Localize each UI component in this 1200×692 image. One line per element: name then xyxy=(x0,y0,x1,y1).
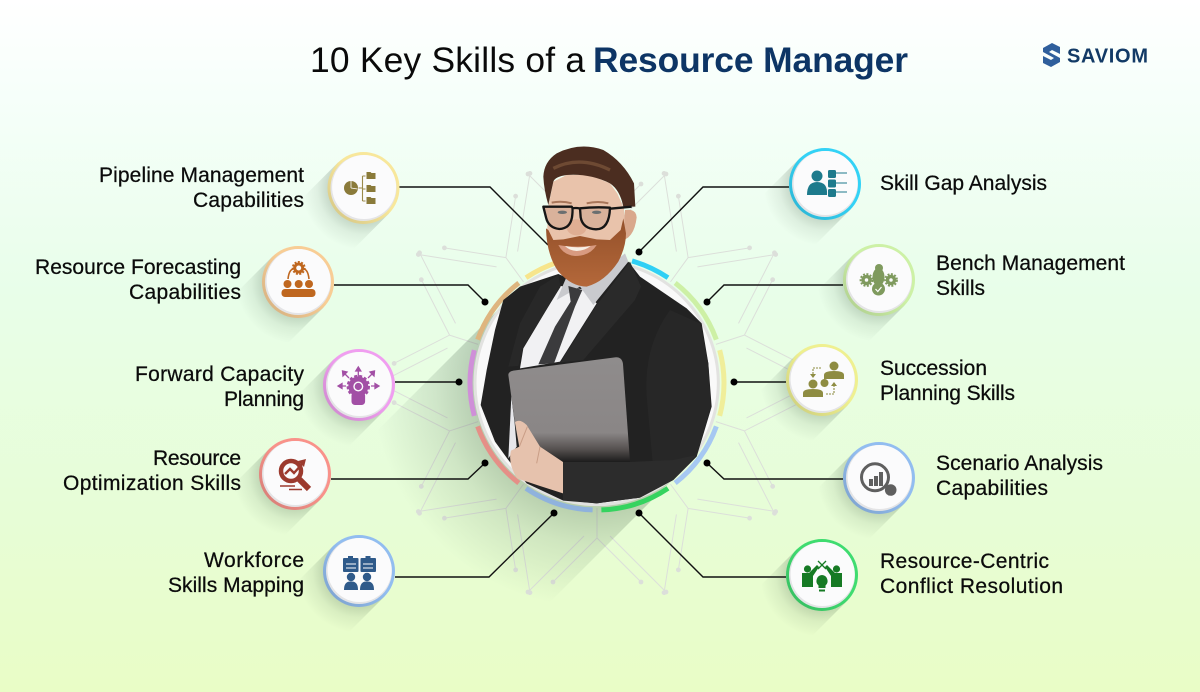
face skin xyxy=(547,175,625,260)
label: Resource Forecasting xyxy=(35,256,241,279)
icon badge xyxy=(288,152,400,263)
label: Bench Management xyxy=(936,252,1125,275)
skill: workforce skills mapping: Skills Mapping xyxy=(168,574,304,597)
connector: bench xyxy=(704,285,843,306)
sleeve xyxy=(563,455,697,503)
icon badge xyxy=(223,246,334,357)
title: Resource Manager xyxy=(593,40,908,80)
skill: succession planning: Planning Skills xyxy=(880,382,1015,405)
label: Pipeline Management xyxy=(99,164,304,187)
icon badge xyxy=(284,349,395,460)
skill: forward capacity planning xyxy=(135,349,395,460)
connector: succession xyxy=(730,378,786,386)
hair xyxy=(543,147,635,207)
head xyxy=(538,147,637,364)
skill: resource optimization: Optimization Skills xyxy=(63,472,241,495)
skill: resource-centric conflict resolution: Conflict Resolution xyxy=(880,575,1063,598)
skill: forward capacity planning: Planning xyxy=(224,388,304,411)
label: Succession xyxy=(880,357,987,380)
skill: skill gap analysis xyxy=(750,148,1047,259)
skill: resource forecasting: Capabilities xyxy=(129,281,241,304)
mouth xyxy=(558,245,597,256)
skill: pipeline management xyxy=(99,152,400,263)
connector: workforce xyxy=(395,510,558,577)
connector: conflict xyxy=(636,510,786,577)
skill: bench management: Skills xyxy=(936,277,985,300)
skill: resource forecasting xyxy=(35,246,334,357)
skill: resource-centric conflict resolution xyxy=(747,539,1063,650)
label: Resource xyxy=(153,447,241,470)
title xyxy=(310,40,908,80)
skill: scenario analysis xyxy=(804,442,1103,553)
tie xyxy=(538,286,582,364)
portrait disc xyxy=(475,261,718,505)
brows xyxy=(552,202,608,203)
icon badge xyxy=(747,539,858,650)
connector: pipeline xyxy=(399,187,548,245)
skill: scenario analysis: Capabilities xyxy=(936,477,1048,500)
label: Workforce xyxy=(204,549,304,572)
icon badge xyxy=(804,244,915,355)
connector: scenario xyxy=(704,460,843,479)
ear xyxy=(622,210,637,242)
icon badge xyxy=(804,442,915,553)
icon badge xyxy=(220,438,331,549)
connector: skill gap xyxy=(636,187,789,256)
laptop xyxy=(508,357,630,462)
glasses xyxy=(543,207,632,229)
collar xyxy=(557,253,628,305)
hand xyxy=(510,421,563,493)
label: Resource-Centric xyxy=(880,550,1049,573)
beard xyxy=(546,218,626,287)
label: Skill Gap Analysis xyxy=(880,172,1047,195)
connector: forecasting xyxy=(334,285,488,306)
radial network decoration xyxy=(374,170,820,596)
portrait ring arcs xyxy=(470,256,724,510)
label: Forward Capacity xyxy=(135,363,304,386)
icon badge xyxy=(747,344,858,455)
logo: Saviom xyxy=(1043,43,1148,68)
skill: succession planning xyxy=(747,344,1015,455)
suit xyxy=(481,262,712,503)
title: 10 Key Skills of a xyxy=(310,40,585,80)
skill: pipeline management: Capabilities xyxy=(193,189,304,212)
connector: forward capacity xyxy=(395,378,462,386)
logo: Saviom: SAVIOM xyxy=(1067,46,1148,68)
icon badge xyxy=(284,535,395,646)
connector: optimization xyxy=(331,460,488,479)
shirt xyxy=(520,286,597,368)
central shadow xyxy=(351,297,683,629)
skill: workforce skills mapping xyxy=(168,535,395,646)
label: Scenario Analysis xyxy=(936,452,1103,475)
skill: bench management xyxy=(804,244,1125,355)
nose xyxy=(567,219,587,235)
icon badge xyxy=(750,148,861,259)
skill: resource optimization xyxy=(63,438,331,549)
lapels xyxy=(561,262,641,362)
portrait: resource manager xyxy=(475,147,718,505)
